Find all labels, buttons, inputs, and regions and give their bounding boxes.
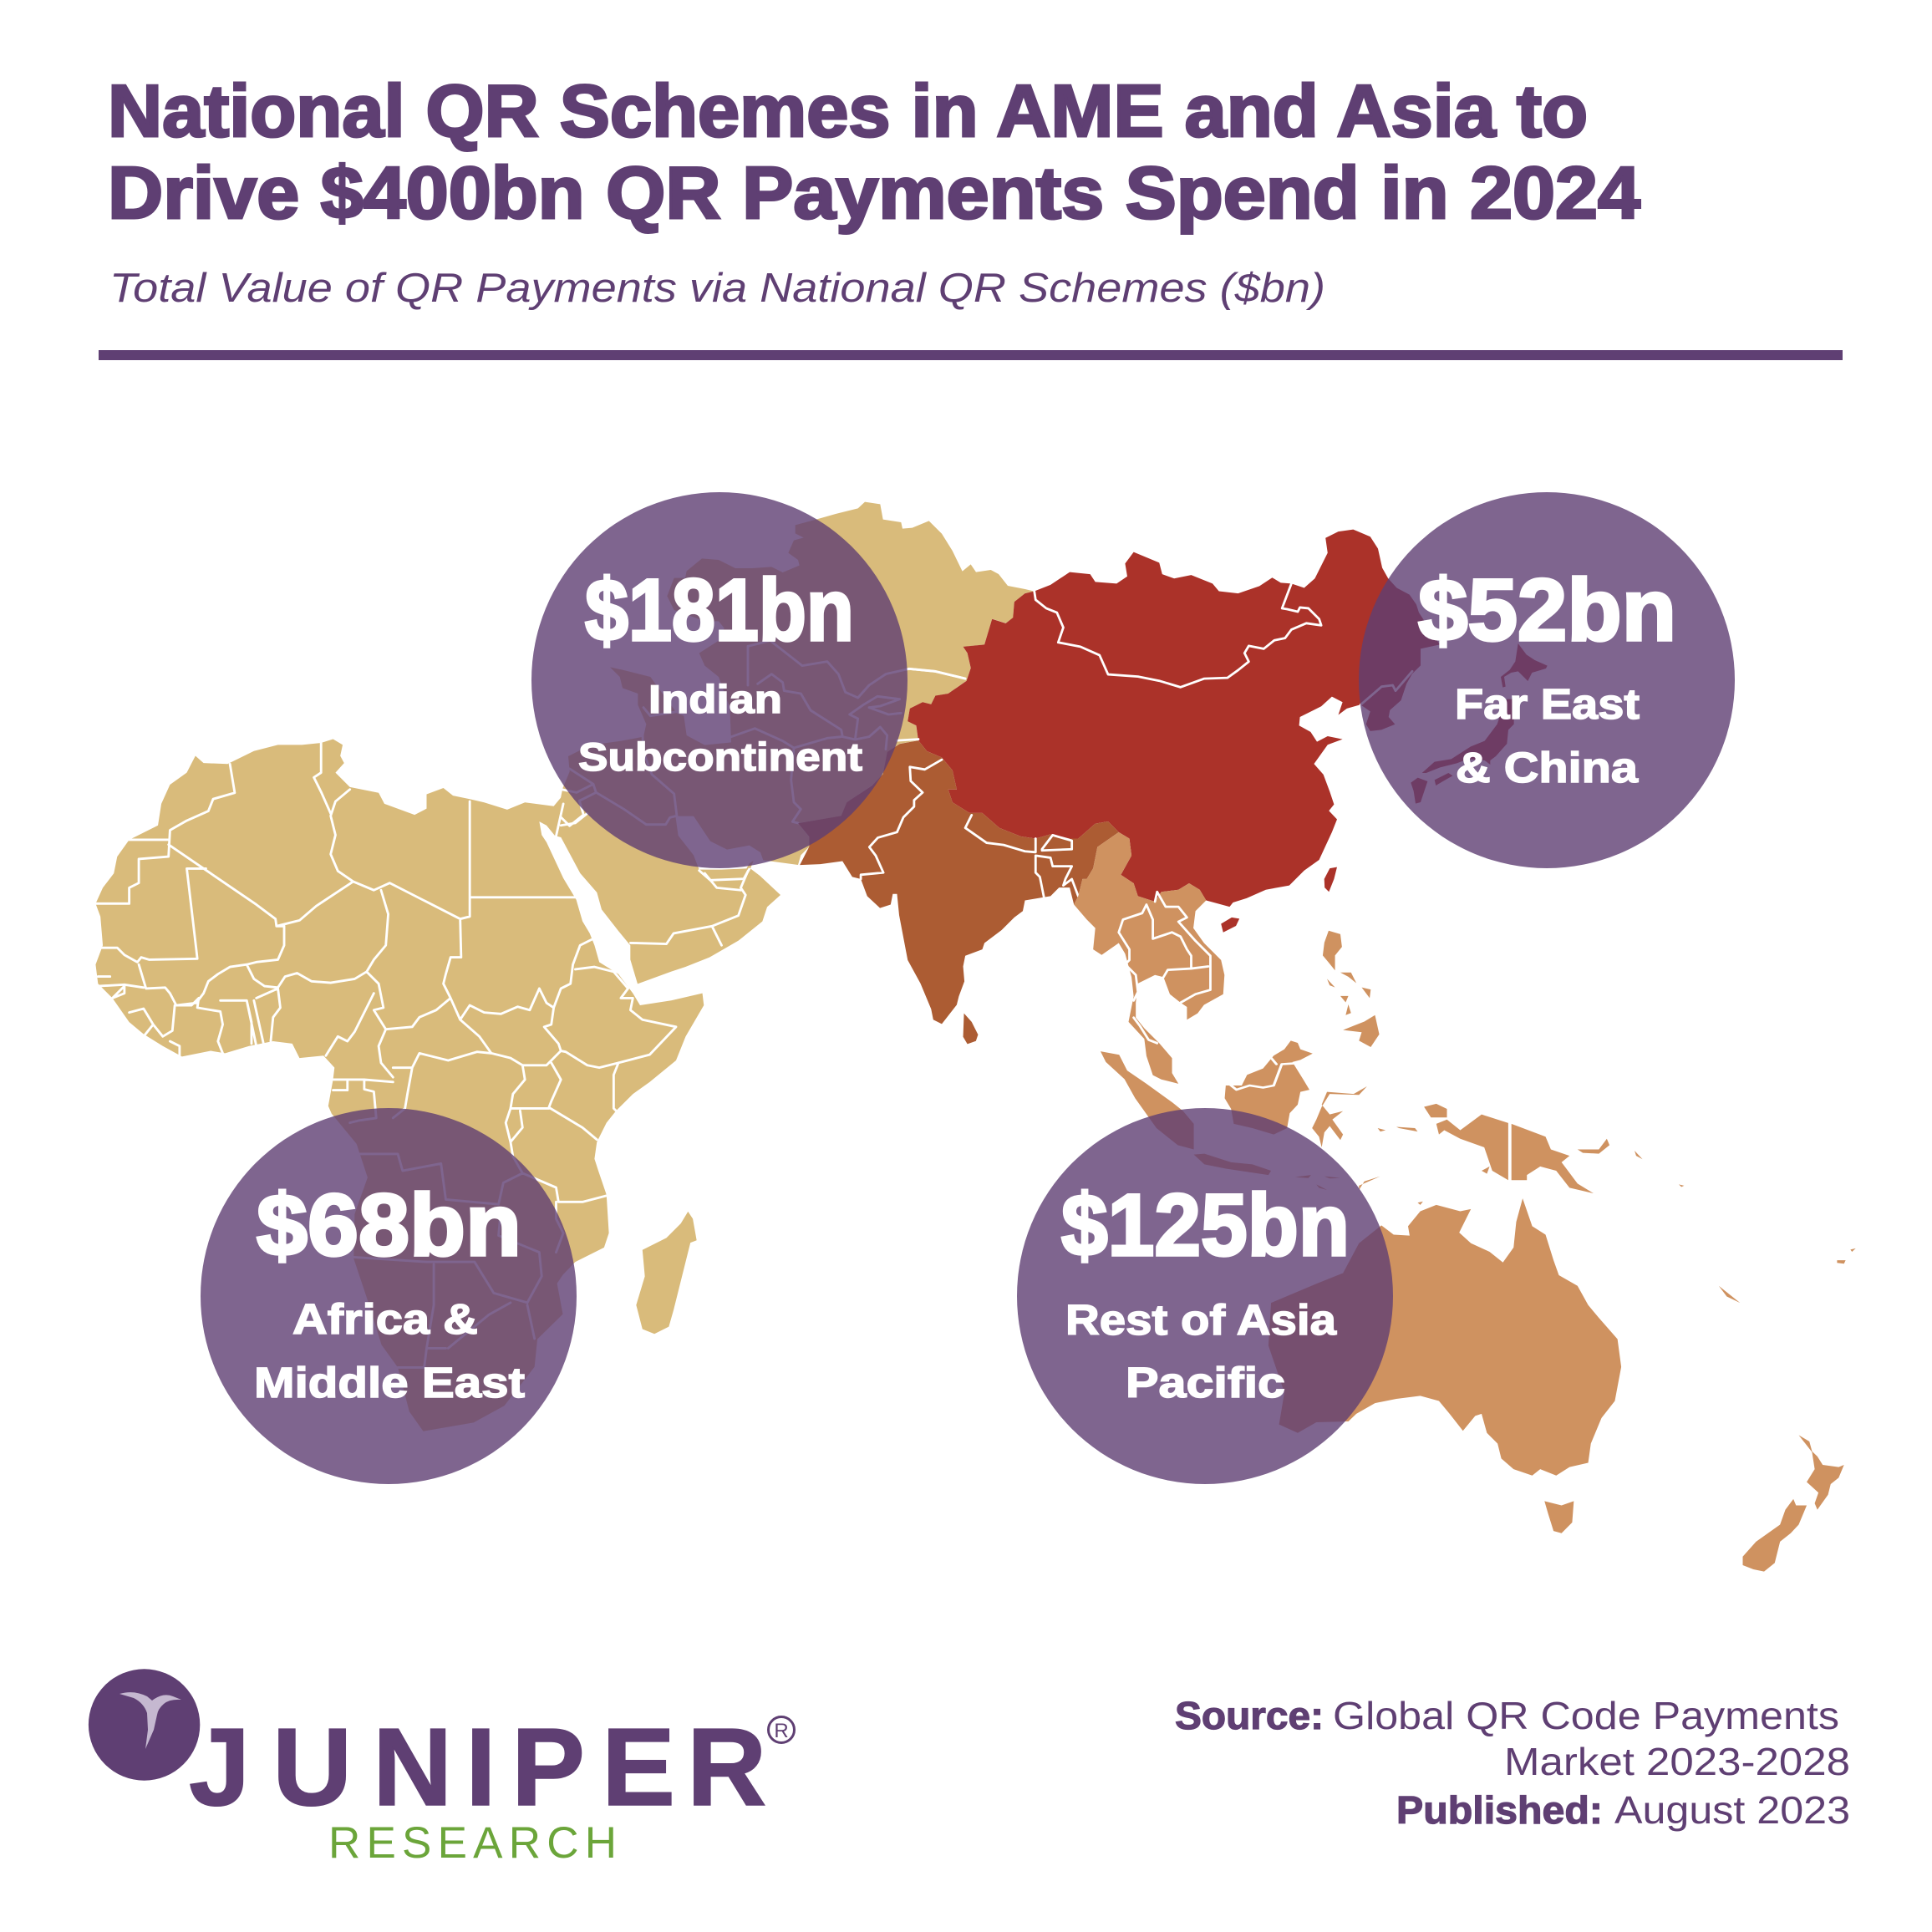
map bbox=[95, 502, 1856, 1572]
source note bbox=[1175, 1694, 1850, 1832]
callout: Africa and Middle East: Africa & bbox=[292, 1295, 478, 1343]
source note: Global QR Code Payments bbox=[1333, 1694, 1839, 1737]
callout: Africa and Middle East: $68bn bbox=[257, 1177, 521, 1274]
callout: Rest of Asia Pacific: $125bn bbox=[1061, 1177, 1350, 1274]
region: Japan and Korea bbox=[1360, 643, 1548, 804]
callout: Indian Subcontinent: Indian bbox=[648, 677, 782, 721]
region: Africa bbox=[95, 739, 704, 1431]
title: Drive $400bn QR Payments Spend in 2024 bbox=[108, 151, 1640, 234]
callout: Rest of Asia Pacific: Rest of Asia bbox=[1065, 1296, 1337, 1344]
registered mark bbox=[769, 1716, 794, 1743]
callout: Far East and China: Far East bbox=[1455, 680, 1640, 728]
callout: Indian Subcontinent: Subcontinent bbox=[578, 735, 862, 779]
wordmark: JUNIPER bbox=[189, 1706, 766, 1828]
title: National QR Schemes in AME and Asia to bbox=[108, 69, 1588, 152]
callout: Indian Subcontinent: $181bn bbox=[585, 562, 854, 659]
region: China and Mongolia bbox=[908, 530, 1440, 933]
callout: Far East and China bbox=[1359, 492, 1735, 868]
source note: August 2023 bbox=[1614, 1788, 1850, 1832]
tagline: RESEARCH bbox=[328, 1818, 617, 1868]
callout: Africa and Middle East bbox=[201, 1108, 577, 1484]
callout: Indian Subcontinent bbox=[531, 492, 908, 868]
registered mark: R bbox=[774, 1720, 789, 1742]
title bbox=[108, 69, 1640, 234]
region: Southeast Asia bbox=[1074, 832, 1224, 1084]
callout: Far East and China: & China bbox=[1456, 744, 1639, 791]
source note: Source: bbox=[1175, 1694, 1324, 1737]
header rule bbox=[99, 350, 1843, 360]
region: Indonesia, Philippines, Australia and Pacific bbox=[1101, 931, 1856, 1572]
icon: logo disc bbox=[89, 1669, 200, 1781]
source note: Market 2023-2028 bbox=[1504, 1740, 1850, 1783]
callout: Africa and Middle East: Middle East bbox=[254, 1359, 525, 1406]
callout: Rest of Asia Pacific bbox=[1017, 1108, 1393, 1484]
source note: Published: bbox=[1396, 1788, 1603, 1832]
subtitle: Total Value of QR Payments via National QR Schemes ($bn) bbox=[109, 266, 1325, 311]
callout: Far East and China: $52bn bbox=[1418, 562, 1676, 659]
region: Arabia borders bbox=[556, 804, 748, 945]
callout: Rest of Asia Pacific: Pacific bbox=[1126, 1359, 1285, 1406]
logo: Juniper Research bbox=[89, 1669, 794, 1868]
region: Middle East and Central Asia bbox=[554, 502, 1035, 984]
region: Indian Subcontinent bbox=[798, 740, 1119, 1044]
